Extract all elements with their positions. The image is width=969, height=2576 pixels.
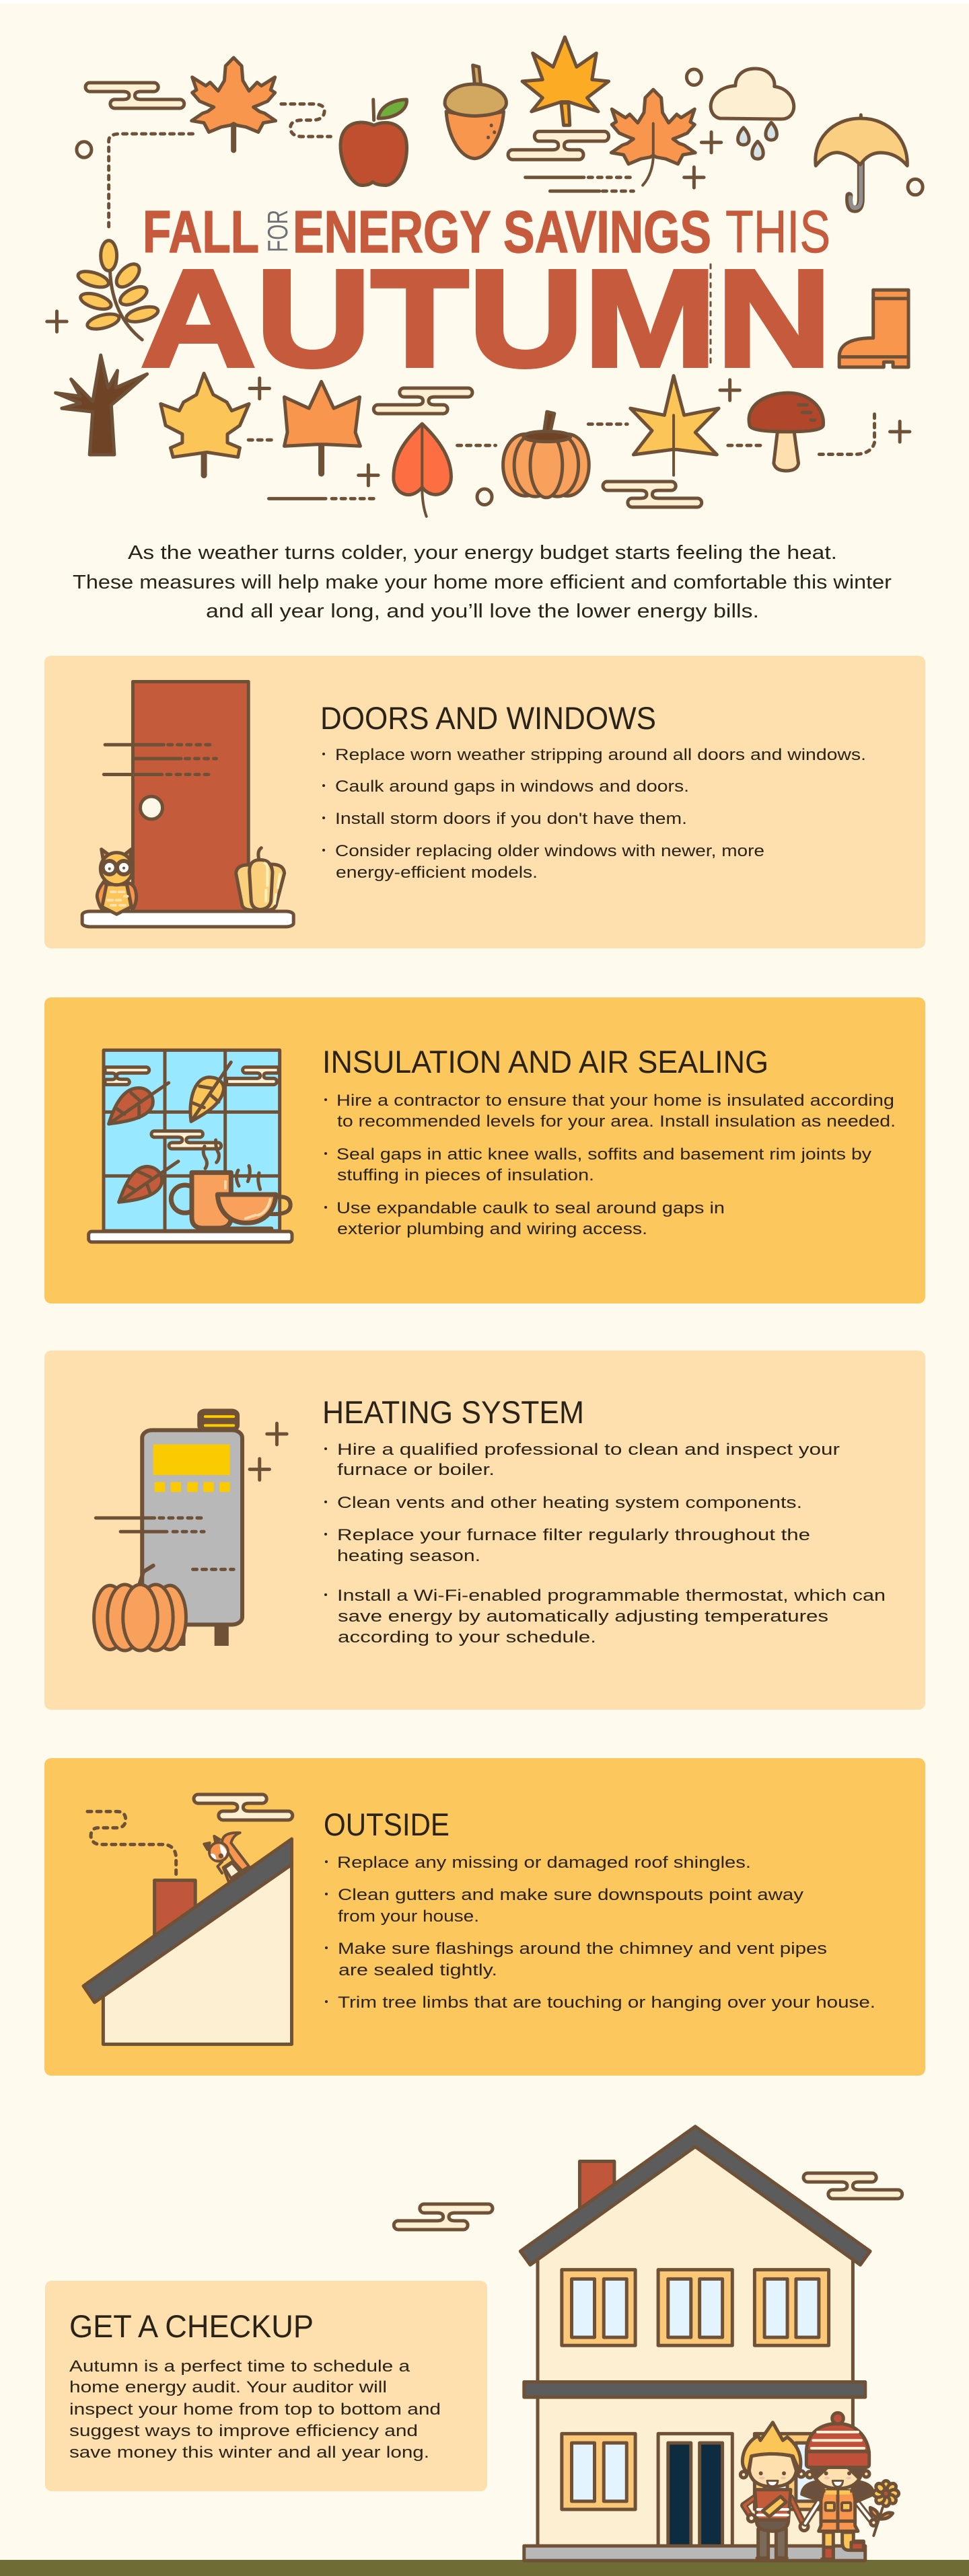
bullet list: Make sure flashings around the chimney and vent pipes [338, 1940, 827, 1958]
bullet list: exterior plumbing and wiring access. [337, 1220, 647, 1238]
icon: cloud upper [508, 131, 609, 159]
bullet list: from your house. [338, 1907, 479, 1926]
icon: cup [202, 1195, 291, 1229]
cloud left of house [394, 2204, 493, 2230]
front step [524, 2546, 865, 2561]
icon: apple [340, 100, 406, 186]
walls [538, 2147, 853, 2550]
roof and chimney [83, 1839, 291, 2044]
door [82, 682, 293, 927]
heading: INSULATION AND AIR SEALING [322, 1044, 768, 1079]
bullet list: Replace worn weather stripping around all doors and windows. [335, 746, 866, 764]
header: icon garland and title [47, 37, 923, 517]
icon: squirrel [204, 1833, 249, 1882]
bullet list: are sealed tightly. [338, 1961, 497, 1979]
intro text: These measures will help make your home more efficient and comfortable this winter [73, 572, 892, 593]
bullet list: Clean gutters and make sure downspouts point away [338, 1886, 803, 1904]
lower window [562, 2433, 829, 2509]
icon: acorn [445, 65, 506, 159]
bullet list: save energy by automatically adjusting temperatures [338, 1607, 828, 1626]
illustration: furnace with pumpkin [94, 1410, 287, 1651]
heading: DOORS AND WINDOWS [320, 700, 656, 736]
illustration: window with leaves and mugs [89, 1050, 292, 1242]
bullet list: Caulk around gaps in windows and doors. [335, 778, 689, 796]
cloud 1 [85, 83, 184, 108]
ground strip [0, 2560, 969, 2576]
icon: split star leaf [631, 376, 719, 476]
dashed line through title [709, 264, 712, 368]
small rings [77, 69, 923, 505]
intro text [73, 542, 892, 622]
panel background [44, 656, 925, 948]
heading: GET A CHECKUP [69, 2308, 314, 2344]
icon: red leaf [394, 424, 451, 517]
bullet list: to recommended levels for your area. Install insulation as needed. [337, 1112, 896, 1131]
floor band [524, 2382, 865, 2397]
bullet list: Hire a qualified professional to clean and inspect your [337, 1441, 840, 1459]
bullet list: furnace or boiler. [337, 1461, 495, 1479]
icon: bare tree [56, 355, 147, 455]
bullet list: according to your schedule. [338, 1628, 596, 1646]
leaf red upper [109, 1083, 169, 1124]
panel background [44, 997, 925, 1303]
panel: heating system [44, 1351, 925, 1710]
bullet list: Seal gaps in attic knee walls, soffits and basement rim joints by [336, 1145, 871, 1164]
icon: mug [171, 1172, 231, 1228]
bullet list: Replace any missing or damaged roof shingles. [337, 1854, 751, 1872]
icon: maple leaf second [611, 89, 695, 186]
bullet list: stuffing in pieces of insulation. [337, 1166, 594, 1184]
title line: Fall for energy savings this: FALL [143, 198, 259, 265]
bullet list: Use expandable caulk to seal around gaps in [336, 1199, 725, 1217]
panel: outside [44, 1758, 925, 2076]
chimney smoke dashes and squirrel [87, 1811, 249, 1882]
bullet list: Install storm doors if you don't have them. [335, 810, 687, 828]
icon: fern sprig [73, 241, 163, 340]
bullet list [324, 1441, 886, 1646]
title line: Fall for energy savings this: FOR [262, 210, 293, 252]
heading: HEATING SYSTEM [322, 1394, 584, 1430]
cloud [194, 1794, 293, 1820]
icon: pumpkin [94, 1566, 186, 1651]
body text: home energy audit. Your auditor will [69, 2378, 387, 2396]
cloud 2 [373, 388, 472, 414]
bullet list: Hire a contractor to ensure that your home is insulated according [336, 1092, 894, 1110]
title line: Fall for energy savings this: THIS [725, 198, 830, 265]
panel: insulation and air sealing [44, 997, 925, 1303]
title: AUTUMN: AUTUMN [141, 241, 832, 395]
icon: yellow squash [236, 848, 285, 910]
top white strip [0, 0, 969, 3]
panel background [44, 1758, 925, 2076]
bullet list: energy-efficient models. [336, 864, 538, 882]
upper windows [562, 2270, 829, 2345]
icon: owl [97, 849, 137, 914]
heading: OUTSIDE [324, 1807, 450, 1842]
roof [520, 2127, 870, 2265]
leaf red lower [119, 1162, 178, 1202]
icon: rain cloud [711, 69, 794, 159]
body text [69, 2357, 441, 2462]
title line: Fall for energy savings this: ENERGY SAVINGS [293, 198, 711, 265]
boy [740, 2423, 808, 2561]
bullet list: heating season. [337, 1547, 480, 1565]
leaf yellow [190, 1062, 231, 1121]
icon: orange leaf [284, 381, 360, 473]
bullet list [324, 1092, 896, 1238]
intro text: As the weather turns colder, your energy budget starts feeling the heat. [128, 542, 837, 564]
girl [802, 2413, 873, 2561]
cloud 3 [603, 482, 702, 507]
chimney [579, 2162, 614, 2209]
plus signs [47, 132, 910, 486]
icon: star leaf [522, 37, 609, 125]
icon: pumpkin [503, 412, 589, 498]
body text: Autumn is a perfect time to schedule a [69, 2357, 410, 2376]
icon: umbrella [816, 115, 907, 209]
dashed connectors [109, 104, 875, 498]
characters: boy and girl [740, 2413, 899, 2561]
bullet list: Install a Wi-Fi-enabled programmable thermostat, which can [337, 1587, 886, 1605]
icon: rain boot [839, 290, 908, 367]
intro text: and all year long, and you’ll love the lower energy bills. [206, 601, 759, 622]
cloud right of house [803, 2173, 902, 2199]
front door [658, 2433, 732, 2550]
illustration: roof with squirrel [83, 1794, 293, 2044]
bullet list: Trim tree limbs that are touching or hanging over your house. [338, 1994, 875, 2012]
icon: yellow leaf [161, 373, 249, 476]
illustration: door with owl and squash [82, 682, 293, 927]
body text: inspect your home from top to bottom and [69, 2400, 441, 2419]
bullet list: Replace your furnace filter regularly throughout the [337, 1526, 810, 1544]
bullet list [322, 746, 866, 882]
bullet list: Consider replacing older windows with newer, more [335, 842, 764, 860]
window clouds [105, 1067, 279, 1149]
bullet list: Clean vents and other heating system components. [337, 1494, 802, 1512]
body text: suggest ways to improve efficiency and [69, 2422, 418, 2440]
icon: mushroom [749, 393, 824, 471]
panel: get a checkup [45, 2281, 487, 2491]
panel: doors and windows [44, 656, 925, 948]
panel background [45, 2281, 487, 2491]
icon: sunflower [870, 2480, 899, 2536]
illustration: house [520, 2127, 870, 2561]
bullet list [325, 1854, 875, 2012]
body text: save money this winter and all year long. [69, 2444, 429, 2462]
icon: maple leaf orange [192, 58, 276, 150]
header icons [47, 37, 923, 517]
panel background [44, 1351, 925, 1710]
icon: steam [203, 1140, 260, 1189]
